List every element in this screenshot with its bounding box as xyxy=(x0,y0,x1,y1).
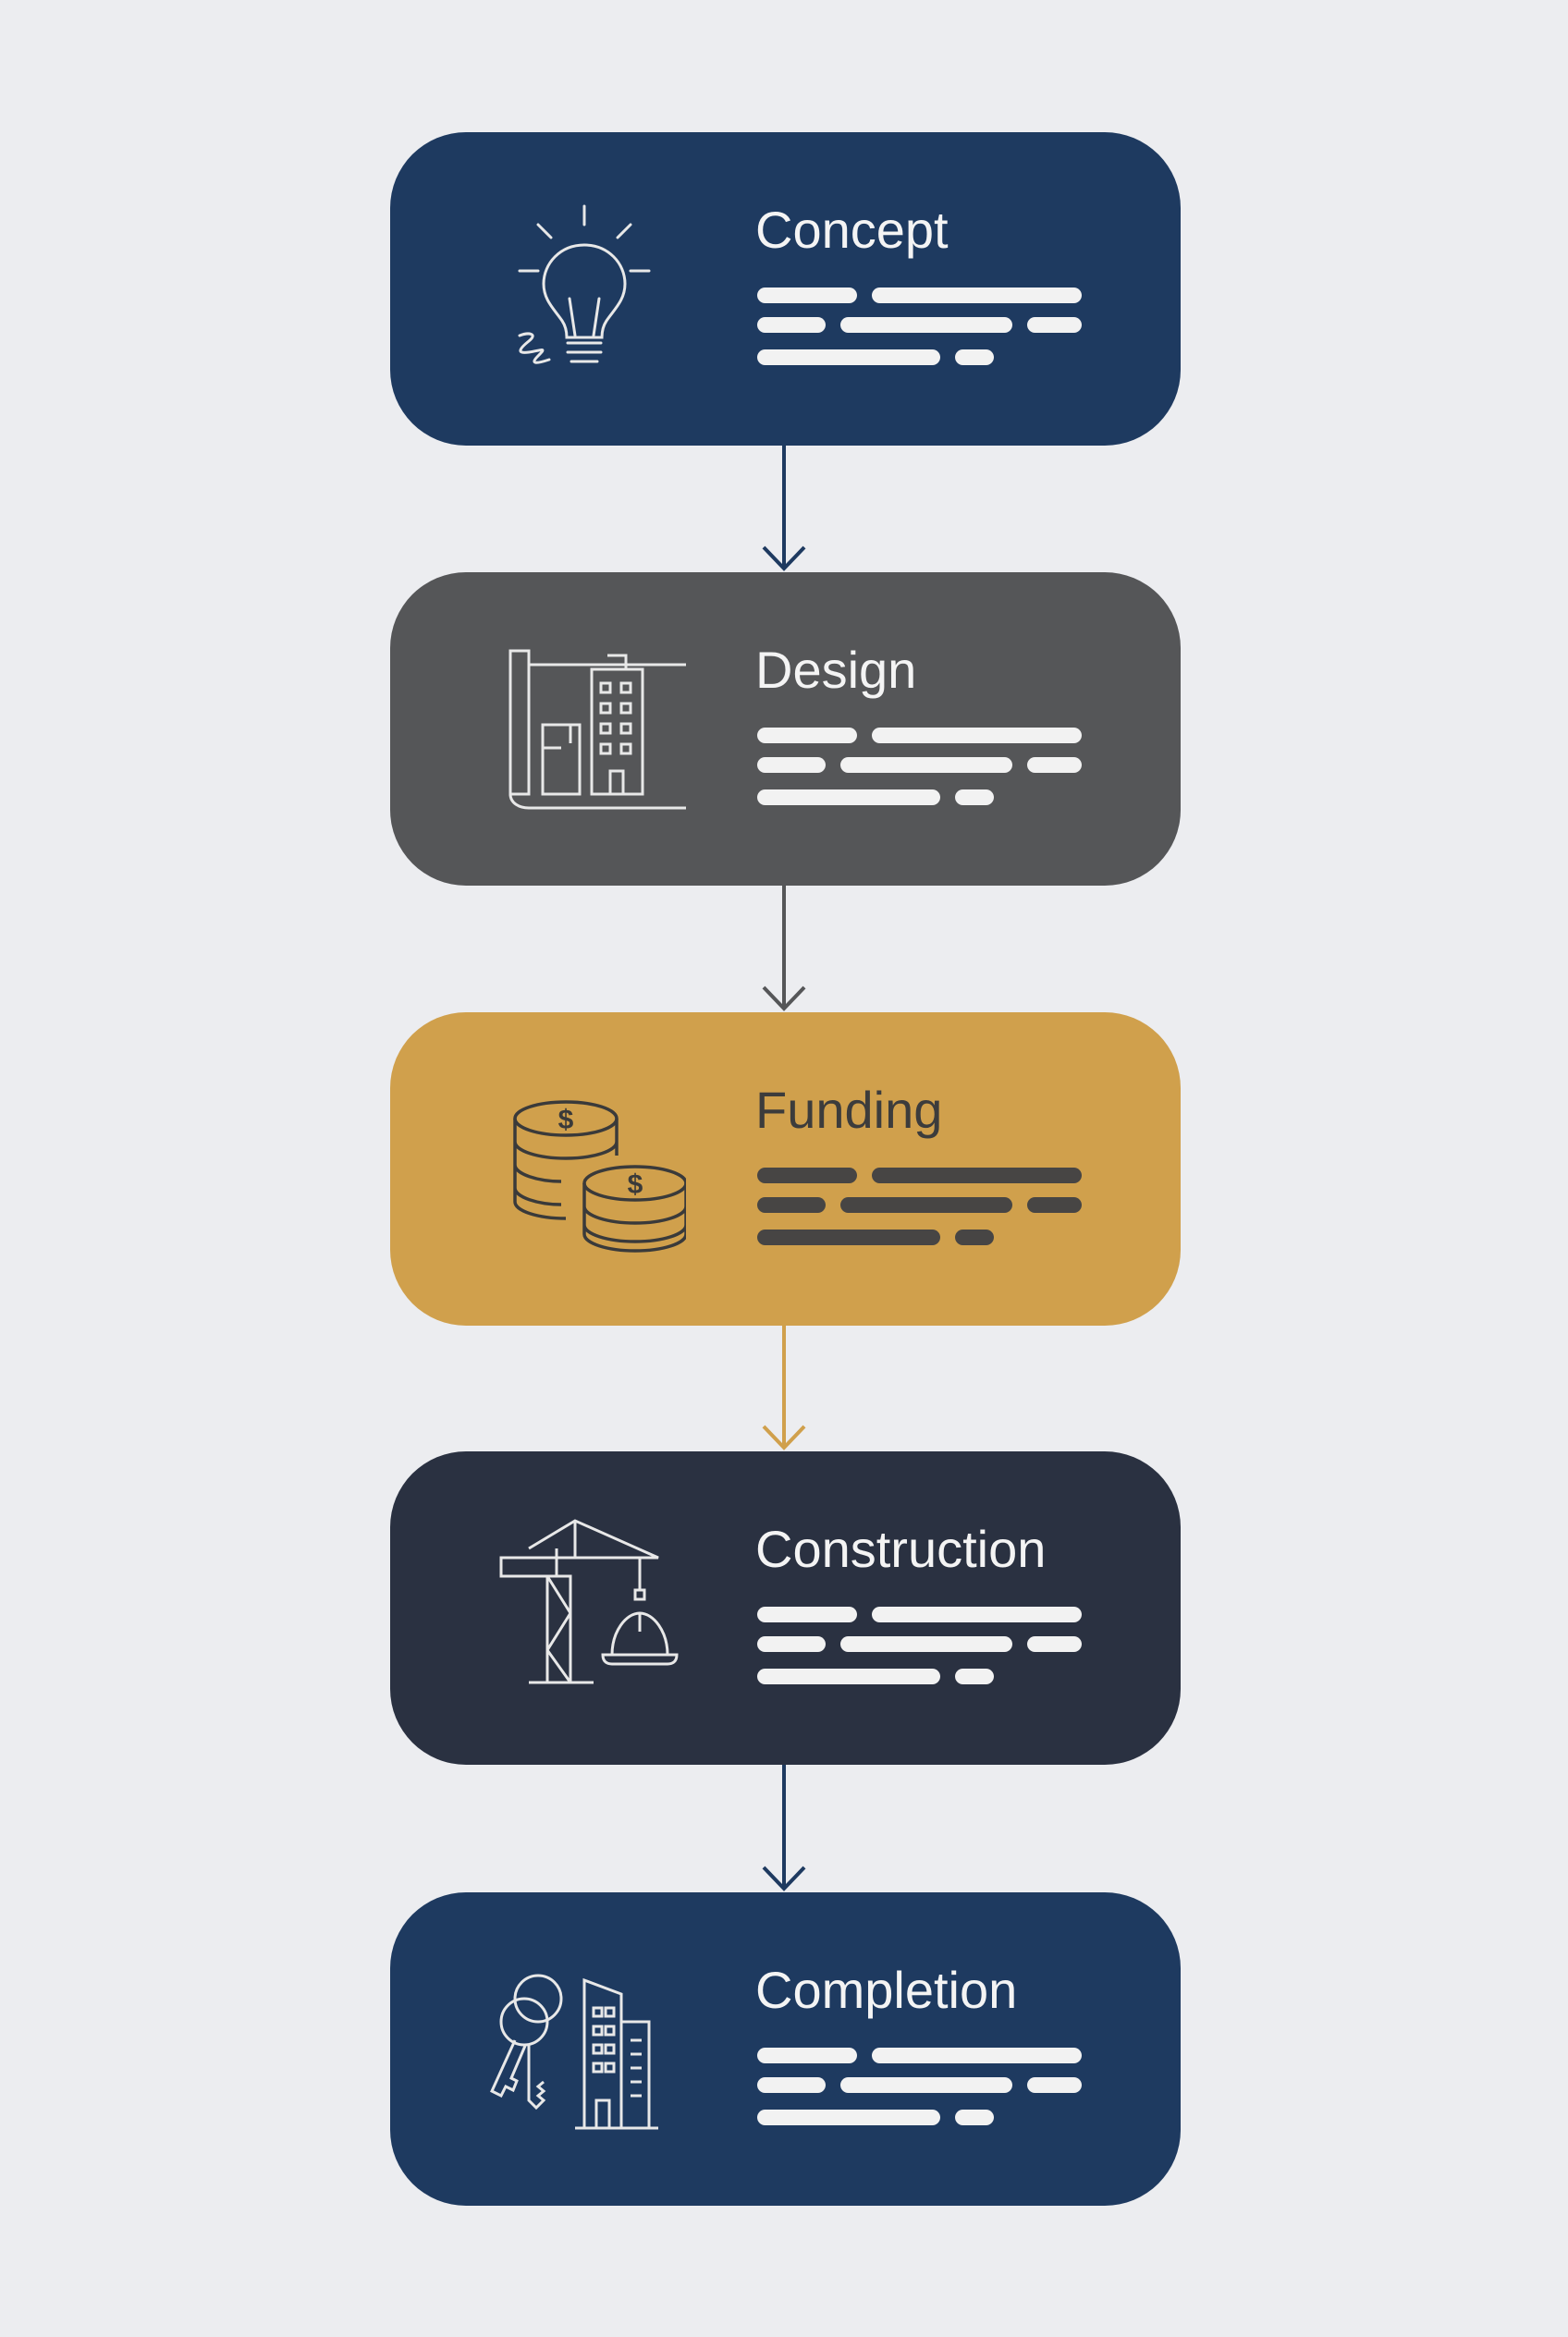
panel: Design xyxy=(390,572,1181,886)
heading: Concept xyxy=(755,201,949,259)
icon: keys and building xyxy=(490,1975,658,2130)
heading: Construction xyxy=(755,1520,1046,1578)
arrow 1 xyxy=(762,446,806,571)
text lines xyxy=(757,1168,1082,1245)
icon: coin stacks xyxy=(513,1100,686,1253)
arrow 2 xyxy=(762,886,806,1011)
heading: Funding xyxy=(755,1081,942,1139)
icon: blueprint and building xyxy=(508,649,686,810)
text lines xyxy=(757,288,1082,365)
text lines xyxy=(757,1607,1082,1684)
text lines xyxy=(757,728,1082,805)
icon: crane and hard hat xyxy=(499,1519,679,1684)
panel: Completion xyxy=(390,1892,1181,2206)
icon: light bulb xyxy=(518,205,651,364)
panel: Funding xyxy=(390,1012,1181,1326)
icon: coin stacks: $ xyxy=(628,1169,643,1200)
heading: Completion xyxy=(755,1961,1017,2019)
heading: Design xyxy=(755,641,916,699)
text lines xyxy=(757,2048,1082,2125)
panel: Concept xyxy=(390,132,1181,446)
arrow 4 xyxy=(762,1765,806,1891)
arrow 3 xyxy=(762,1326,806,1450)
icon: coin stacks: $ xyxy=(558,1105,574,1135)
panel: Construction xyxy=(390,1451,1181,1765)
